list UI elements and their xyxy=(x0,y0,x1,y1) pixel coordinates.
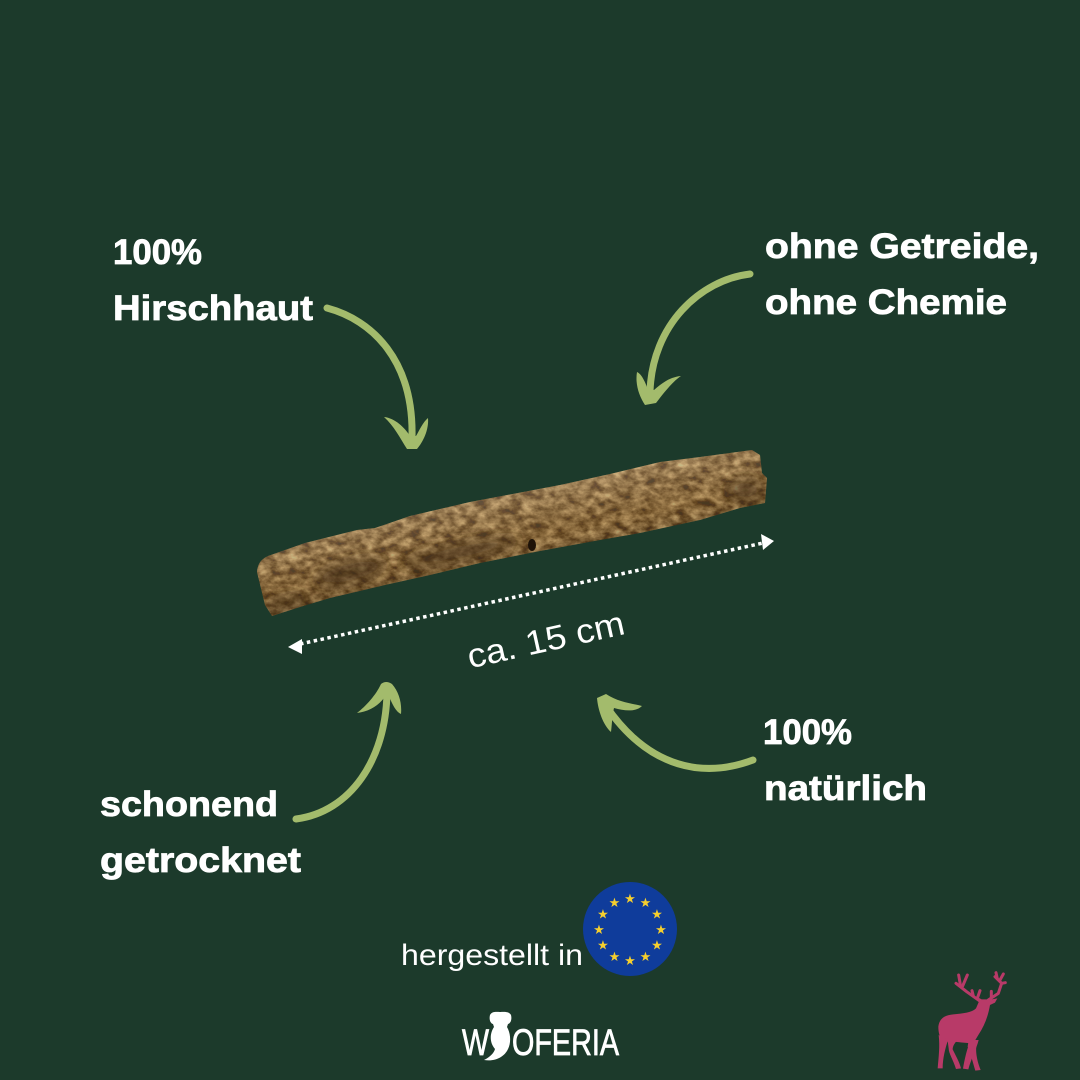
label: 100% natürlich: 100% xyxy=(763,713,852,752)
logo: WOOFERIA: W xyxy=(462,1022,489,1063)
dimension arrow: dotted double-headed xyxy=(288,534,774,654)
icon: EU flag circle: ★ xyxy=(609,950,620,965)
label: schonend getrocknet: schonend xyxy=(100,785,278,824)
label: schonend getrocknet xyxy=(100,785,301,880)
icon: EU flag circle: ★ xyxy=(609,896,620,911)
icon: EU flag circle: ★ xyxy=(640,950,651,965)
icon: deer silhouette xyxy=(938,973,1005,1071)
label: 100% Hirschhaut: Hirschhaut xyxy=(113,289,313,328)
icon: EU flag circle: ★ xyxy=(651,938,663,954)
product photo: deer skin stick xyxy=(250,445,775,620)
icon: EU flag circle: ★ xyxy=(624,954,636,969)
label: ohne Getreide, ohne Chemie: ohne Getreide, xyxy=(765,227,1039,266)
text: hergestellt in: hergestellt in xyxy=(401,939,583,972)
icon: EU flag circle: ★ xyxy=(593,923,605,938)
arrow: schonend getrocknet to product xyxy=(296,682,401,819)
label: ohne Getreide, ohne Chemie xyxy=(765,227,1039,322)
label: 100% Hirschhaut: 100% xyxy=(113,233,202,272)
label: 100% natürlich xyxy=(763,713,927,808)
label: ohne Getreide, ohne Chemie: ohne Chemie xyxy=(765,283,1007,322)
icon: EU flag circle: ★ xyxy=(640,896,651,911)
icon: EU flag circle: ★ xyxy=(624,892,636,907)
icon: EU flag circle: ★ xyxy=(655,923,667,938)
icon: EU flag circle: ★ xyxy=(597,908,609,922)
label: 100% natürlich: natürlich xyxy=(764,769,927,808)
icon: dog silhouette xyxy=(484,1012,511,1060)
arrow: ohne Getreide to product xyxy=(636,274,750,405)
label: schonend getrocknet: getrocknet xyxy=(100,841,301,880)
logo: WOOFERIA xyxy=(462,1012,619,1063)
icon: EU flag circle xyxy=(583,882,677,976)
icon: EU flag circle: ★ xyxy=(651,908,663,922)
dimension label: ca. 15 cm: ca. 15 cm xyxy=(464,604,628,676)
icon: EU flag circle: ★ xyxy=(597,938,609,954)
arrow: 100% natürlich to product xyxy=(597,694,753,768)
logo: WOOFERIA: OFERIA xyxy=(512,1022,619,1063)
label: 100% Hirschhaut xyxy=(113,233,313,328)
arrow: Hirschhaut to product xyxy=(327,308,428,449)
